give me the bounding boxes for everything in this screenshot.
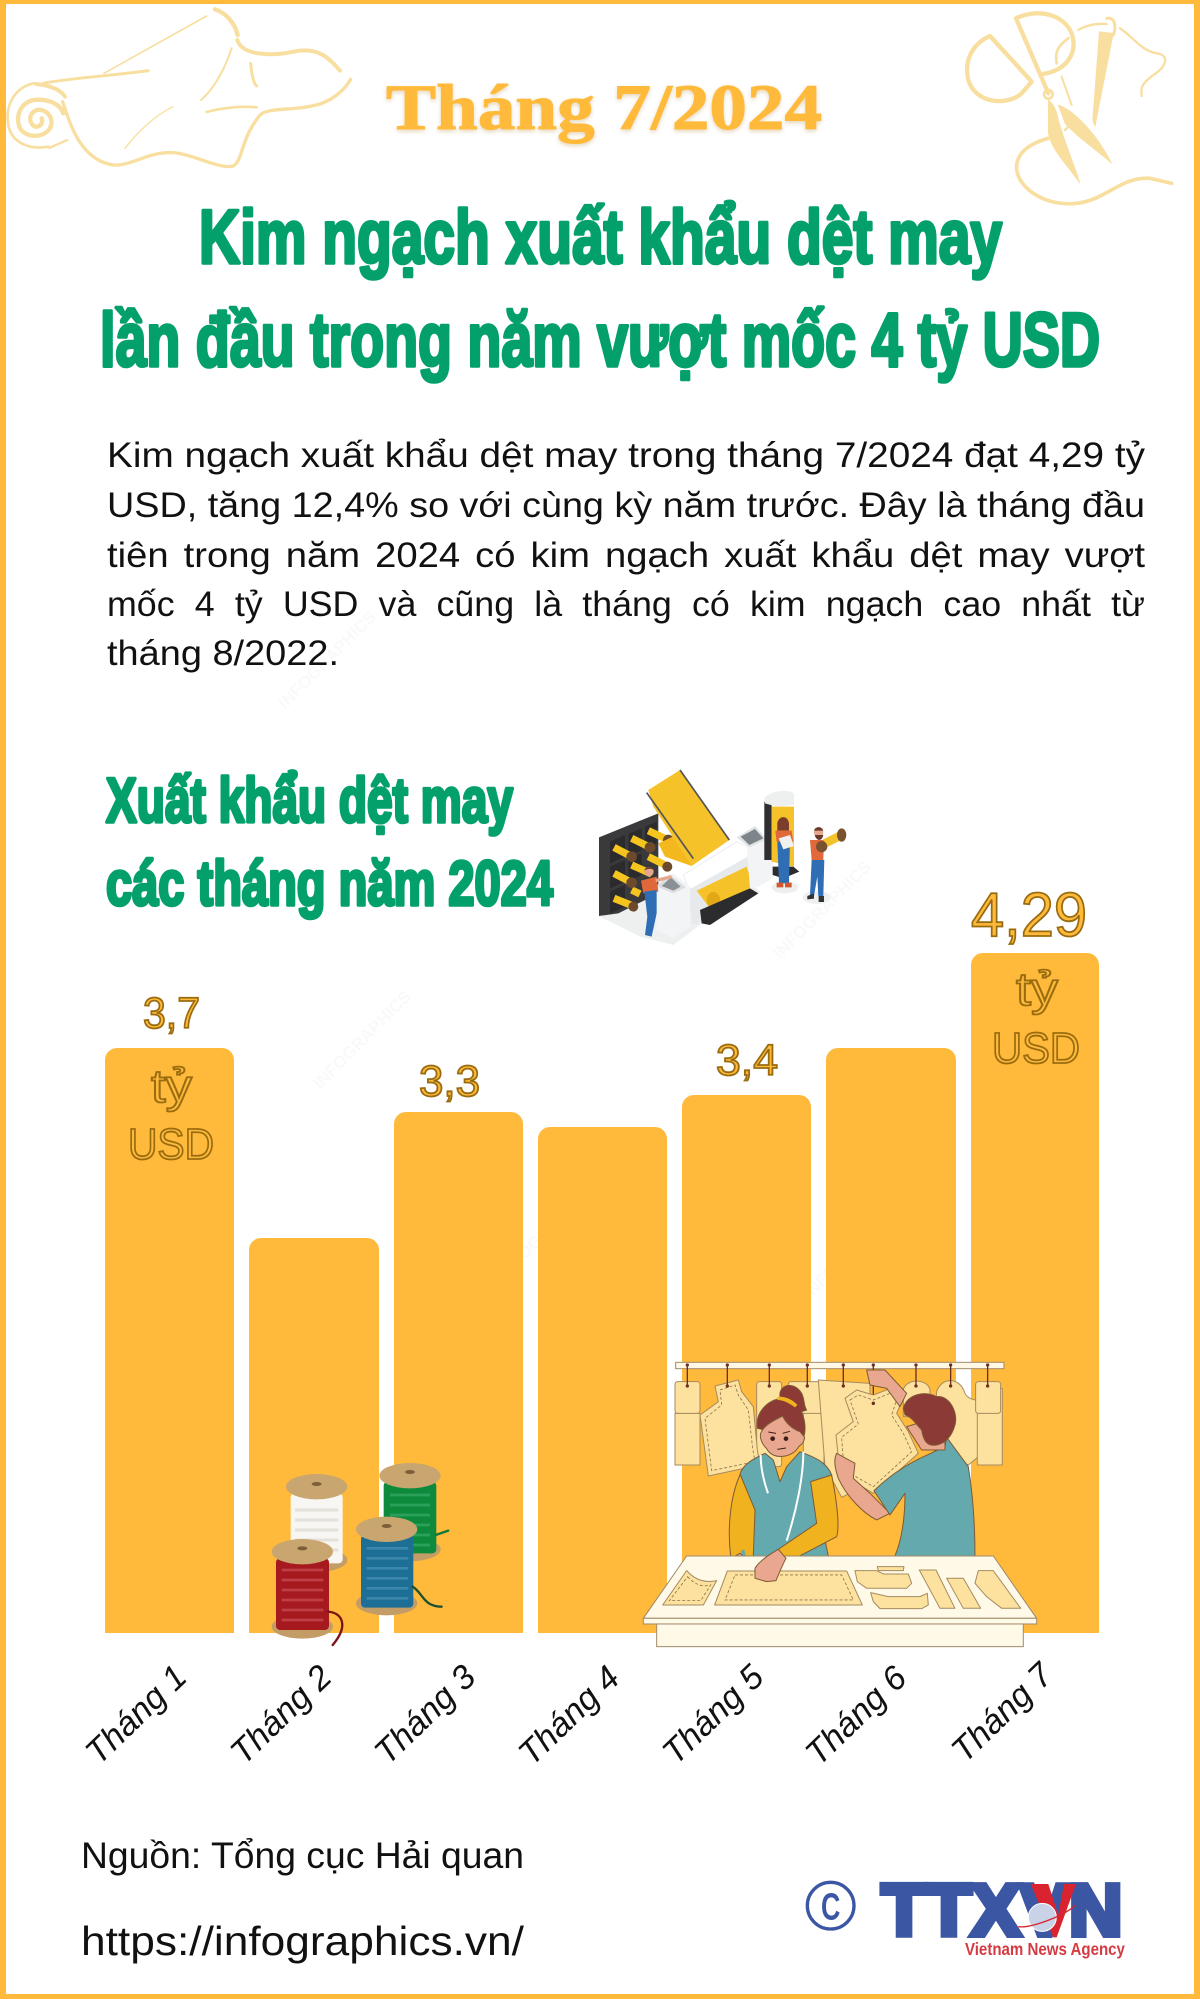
heading: chart title: Xuất khẩu dệt may — [106, 766, 513, 836]
icon: scissors and needle — [967, 13, 1172, 204]
spool: red — [272, 1539, 342, 1645]
text block: introduction — [107, 436, 1146, 673]
worker left — [641, 867, 672, 937]
spool: blue — [356, 1517, 442, 1615]
value labels: 3,3 — [419, 1057, 480, 1106]
axis labels: Tháng 6 — [798, 1659, 914, 1773]
worker middle — [775, 817, 794, 887]
held pattern — [836, 1387, 918, 1493]
value labels: USD — [128, 1120, 214, 1169]
text block: introduction: tháng 8/2022. — [107, 634, 339, 673]
cutting table — [643, 1549, 1037, 1647]
hand over table — [755, 1549, 786, 1582]
bar: Tháng 5 — [682, 1095, 811, 1633]
bar: Tháng 1 — [105, 1048, 234, 1633]
icon: thread spools — [272, 1463, 448, 1645]
worker right — [807, 827, 846, 902]
value labels: 3,4 — [716, 1036, 778, 1085]
icon: fabric roll — [8, 9, 351, 167]
axis labels: Tháng 2 — [223, 1658, 339, 1772]
hanging patterns — [675, 1380, 1002, 1497]
axis labels: Tháng 1 — [78, 1658, 194, 1772]
value labels: 4,29 — [971, 881, 1087, 950]
value labels: USD — [992, 1024, 1080, 1073]
bar: Tháng 3 — [394, 1112, 523, 1633]
axis labels: Tháng 5 — [655, 1658, 771, 1772]
bar: Tháng 4 — [538, 1127, 667, 1633]
text block: introduction: mốc 4 tỷ USD và cũng là tháng có kim ngạch cao nhất từ — [107, 585, 1145, 624]
text block: source: Nguồn: Tổng cục Hải quan — [81, 1835, 524, 1876]
rail and pins — [676, 1362, 1004, 1403]
icon: textile machine with workers — [599, 770, 846, 945]
bar: Tháng 7 — [971, 953, 1099, 1633]
axis labels — [78, 1655, 1061, 1773]
logo: TTXVN: Vietnam News Agency — [965, 1939, 1125, 1959]
logo: TTXVN: TTXVN — [882, 1870, 1122, 1951]
axis labels: Tháng 3 — [367, 1658, 483, 1772]
logo: TTXVN: C — [821, 1885, 840, 1928]
text block: introduction: Kim ngạch xuất khẩu dệt may trong tháng 7/2024 đạt 4,29 tỷ — [107, 436, 1146, 475]
value labels: tỷ — [151, 1060, 192, 1112]
icon: tailors at cutting table — [643, 1362, 1037, 1647]
text block: website: https://infographics.vn/ — [81, 1918, 525, 1964]
value labels — [128, 881, 1087, 1169]
heading: chart title: các tháng năm 2024 — [106, 849, 553, 919]
spool: green — [379, 1463, 448, 1561]
bar: Tháng 2 — [249, 1238, 379, 1633]
title: headline — [100, 195, 1100, 383]
woman tailor — [728, 1385, 838, 1575]
man tailor — [835, 1370, 975, 1556]
value labels: 3,7 — [143, 989, 200, 1038]
axis labels: Tháng 7 — [944, 1655, 1061, 1770]
title: month: Tháng 7/2024 — [386, 72, 822, 144]
bar chart — [105, 953, 1099, 1633]
bar: Tháng 6 — [826, 1048, 956, 1633]
watermark — [274, 607, 905, 1303]
heading: chart title — [106, 766, 553, 919]
spool: white — [286, 1474, 347, 1572]
logo: TTXVN — [807, 1870, 1125, 1959]
axis labels: Tháng 4 — [511, 1659, 627, 1773]
value labels: tỷ — [1016, 963, 1058, 1015]
text block: introduction: USD, tăng 12,4% so với cùng kỳ năm trước. Đây là tháng đầu — [107, 486, 1145, 525]
text block: introduction: tiên trong năm 2024 có kim ngạch xuất khẩu dệt may vượt — [107, 536, 1145, 575]
